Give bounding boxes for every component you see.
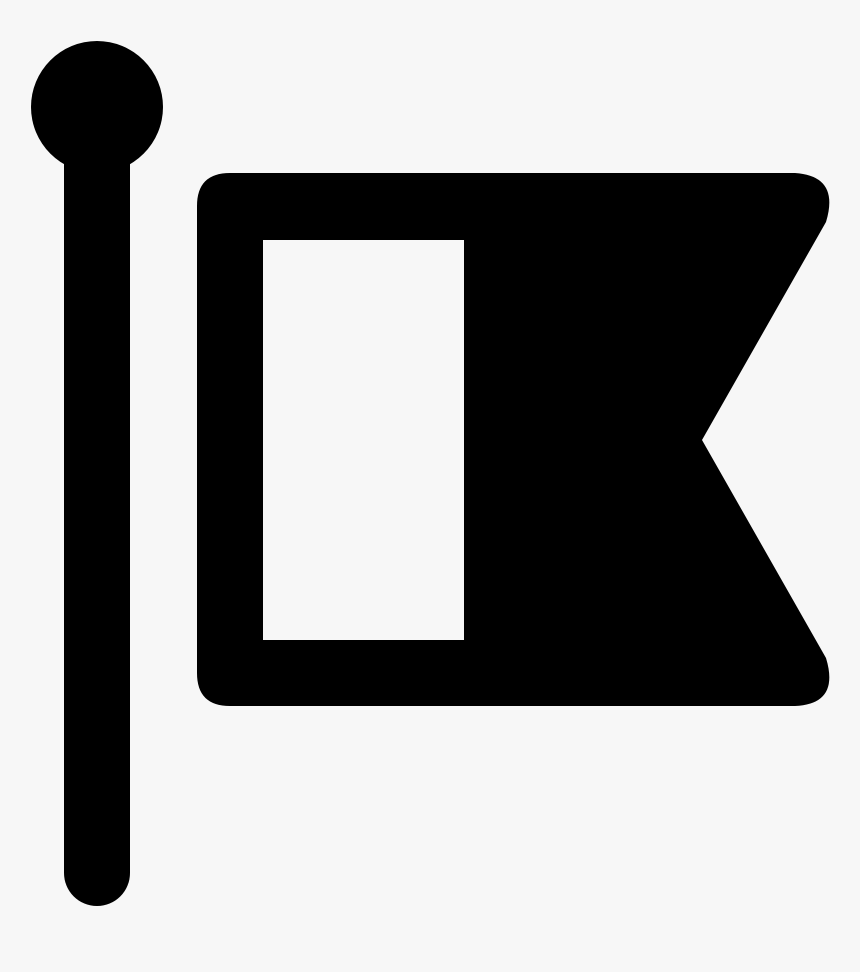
icon: flag cloth [197, 173, 829, 706]
icon: flag pole [31, 41, 163, 906]
